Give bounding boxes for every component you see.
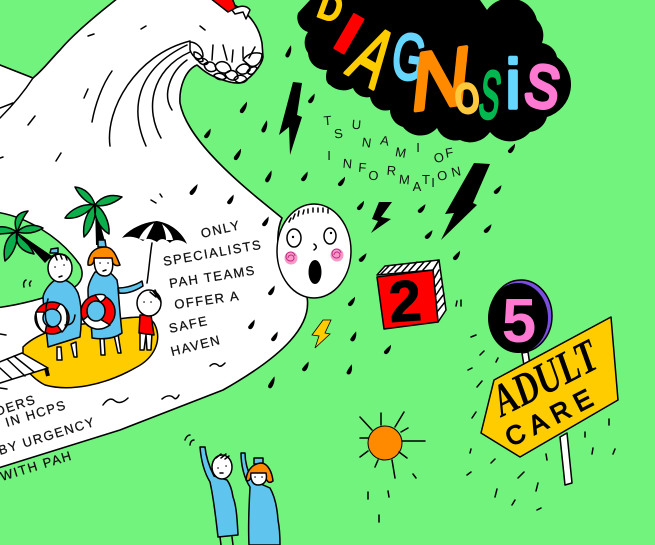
sign disc number 5	[488, 280, 552, 356]
tsunami of information text: A	[379, 132, 391, 149]
tsunami wave	[0, 0, 308, 469]
pier	[0, 353, 48, 384]
child	[137, 290, 161, 350]
wave curl lines	[0, 26, 205, 161]
safe haven text: HAVEN	[169, 332, 223, 359]
two nurses waving	[185, 435, 280, 545]
sign disc number 5: 5	[502, 287, 536, 356]
black cloud	[297, 0, 571, 142]
green hill behind palm	[0, 212, 82, 308]
red box number 2	[377, 260, 446, 335]
providers text: IN HCPS	[3, 397, 68, 430]
tsunami of information text: T	[422, 172, 430, 187]
adult care sign	[481, 317, 618, 457]
diagnosis title: N	[407, 29, 474, 129]
tsunami of information text: I	[431, 175, 435, 190]
diagnosis title: i	[505, 45, 521, 123]
nurse with orange hair and life ring	[81, 240, 143, 355]
diagnosis title: I	[323, 1, 374, 67]
diagnosis title: S	[520, 51, 565, 123]
palm tree two	[65, 187, 122, 245]
safe haven text: ONLY	[199, 217, 242, 241]
island	[23, 317, 158, 388]
water squiggles	[0, 194, 225, 405]
person riding wave	[210, 0, 250, 19]
sun	[360, 412, 425, 522]
tsunami of information text	[323, 113, 462, 194]
safe haven text: SPECIALISTS	[162, 237, 263, 269]
diagnosis title: S	[475, 57, 506, 135]
motion ticks around sign	[456, 300, 615, 510]
tsunami of information text: M	[394, 144, 407, 161]
red box number 2: 2	[387, 268, 423, 335]
tsunami of information text: T	[323, 113, 332, 128]
tsunami of information text: S	[333, 125, 344, 142]
diagnosis title: O	[453, 76, 482, 123]
tsunami of information text: N	[361, 134, 372, 151]
safe haven text	[162, 217, 263, 359]
safe haven text: PAH TEAMS	[168, 262, 257, 291]
tsunami of information text: N	[342, 156, 353, 171]
tsunami of information text: O	[436, 167, 449, 184]
providers text	[0, 392, 97, 484]
tsunami of information text: I	[416, 140, 420, 155]
diagnosis title: A	[335, 9, 411, 105]
sign pole	[522, 352, 572, 485]
tsunami of information text: F	[444, 144, 454, 161]
adult care sign: ADULT	[481, 329, 608, 427]
tsunami of information text: O	[368, 168, 379, 183]
tsunami of information text: F	[358, 160, 367, 175]
face	[277, 204, 351, 298]
adult care sign: CARE	[500, 383, 597, 452]
rain drops	[189, 45, 517, 389]
lightning bolts	[279, 82, 490, 348]
safe haven text: OFFER A	[173, 288, 241, 312]
diagnosis title: G	[388, 18, 431, 95]
tsunami of information text: O	[432, 149, 446, 166]
nurse with life ring	[35, 248, 81, 360]
tsunami of information text: N	[450, 163, 462, 180]
tsunami of information text: M	[398, 172, 410, 187]
palm tree one	[0, 211, 52, 263]
umbrella	[122, 221, 187, 283]
safe haven text: SAFE	[168, 313, 210, 336]
providers text: WITH PAH	[0, 448, 74, 484]
tsunami of information text: A	[413, 179, 422, 194]
diagnosis title	[312, 0, 565, 135]
tsunami of information text: I	[327, 148, 331, 163]
tsunami of information text: R	[386, 163, 397, 178]
wave foam crest	[190, 42, 262, 83]
tsunami of information text: U	[351, 117, 362, 132]
